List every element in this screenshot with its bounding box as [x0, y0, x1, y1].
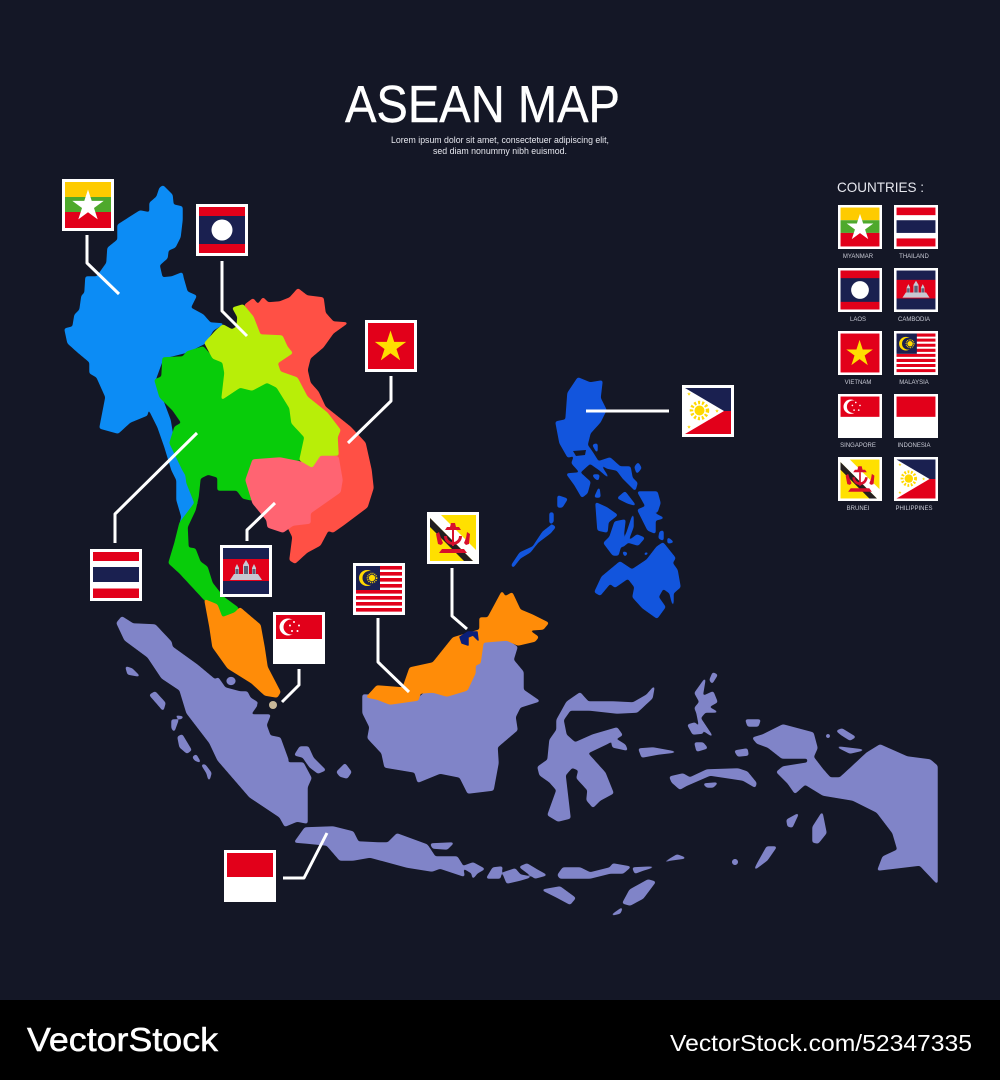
legend item: Malaysia [894, 331, 938, 386]
legend item: Vietnam: VIETNAM [845, 380, 871, 386]
Papua and nearby islands [732, 725, 937, 883]
country: Brunei [460, 632, 478, 645]
leader line: Thailand [115, 433, 197, 543]
legend item: Indonesia: INDONESIA [897, 443, 931, 449]
legend item: Brunei [838, 457, 882, 512]
title: ASEAN MAP [345, 76, 620, 134]
subtitle text: Lorem ipsum dolor sit amet, consectetuer adipiscing elit, [391, 135, 609, 145]
Manila Bay [573, 450, 586, 456]
country: Thailand [155, 347, 305, 618]
country: Vietnam [245, 289, 373, 563]
leader line: Singapore [282, 669, 299, 702]
legend item: Myanmar [838, 205, 882, 260]
legend item: Laos [838, 268, 882, 323]
flag on map: Singapore [273, 612, 325, 664]
Java and Lesser Sunda islands [295, 827, 685, 915]
legend item: Cambodia [894, 268, 938, 323]
country: Indonesia [117, 617, 937, 915]
leader line: Brunei [452, 568, 467, 629]
subtitle text: sed diam nonummy nibh euismod. [433, 146, 567, 156]
country: Myanmar [65, 186, 223, 532]
flag on map: Laos [196, 204, 248, 256]
legend item: Singapore [838, 394, 882, 449]
country: Laos [205, 305, 340, 467]
flag on map: Malaysia [353, 563, 405, 615]
countries legend [837, 179, 938, 512]
flag on map: Philippines [682, 385, 734, 437]
legend item: Philippines [894, 457, 938, 512]
legend item: Philippines: PHILIPPINES [895, 506, 933, 512]
legend item: Laos: LAOS [850, 317, 866, 323]
leader line: Vietnam [348, 376, 391, 443]
legend item: Thailand: THAILAND [899, 254, 930, 260]
subtitle text [391, 135, 609, 156]
legend item: Vietnam [838, 331, 882, 386]
leader line: Malaysia [378, 618, 409, 692]
leader line: Philippines [586, 410, 669, 412]
flag on map: Vietnam [365, 320, 417, 372]
legend heading: COUNTRIES : [837, 179, 924, 195]
leader line: Cambodia [247, 503, 275, 541]
country: Singapore [269, 701, 277, 709]
country: Malaysia Borneo [367, 592, 548, 704]
Kalimantan [363, 639, 539, 793]
flag on map: Cambodia [220, 545, 272, 597]
leader line: Indonesia [283, 833, 327, 878]
legend item: Brunei: BRUNEI [847, 506, 870, 512]
footer brand: VectorStock [27, 1021, 219, 1058]
legend item: Indonesia [894, 394, 938, 449]
Sulawesi and Maluku [538, 673, 760, 821]
legend item: Malaysia: MALAYSIA [899, 380, 929, 386]
flag on map: Brunei [427, 512, 479, 564]
legend item: Singapore: SINGAPORE [840, 443, 876, 449]
country: Cambodia [246, 455, 342, 532]
flag on map: Myanmar [62, 179, 114, 231]
legend item: Myanmar: MYANMAR [843, 254, 874, 260]
Sumatra and nearby islands [117, 617, 351, 826]
country: Malaysia peninsula [205, 600, 280, 697]
footer image id: VectorStock.com/52347335 [670, 1030, 972, 1056]
footer bar [0, 1000, 1000, 1080]
legend item: Thailand [894, 205, 938, 260]
flag on map: Indonesia [224, 850, 276, 902]
flag on map: Thailand [90, 549, 142, 601]
country: Philippines [512, 378, 680, 618]
leader line: Myanmar [87, 235, 119, 294]
legend item: Cambodia: CAMBODIA [898, 317, 930, 323]
leader line: Laos [222, 261, 247, 336]
